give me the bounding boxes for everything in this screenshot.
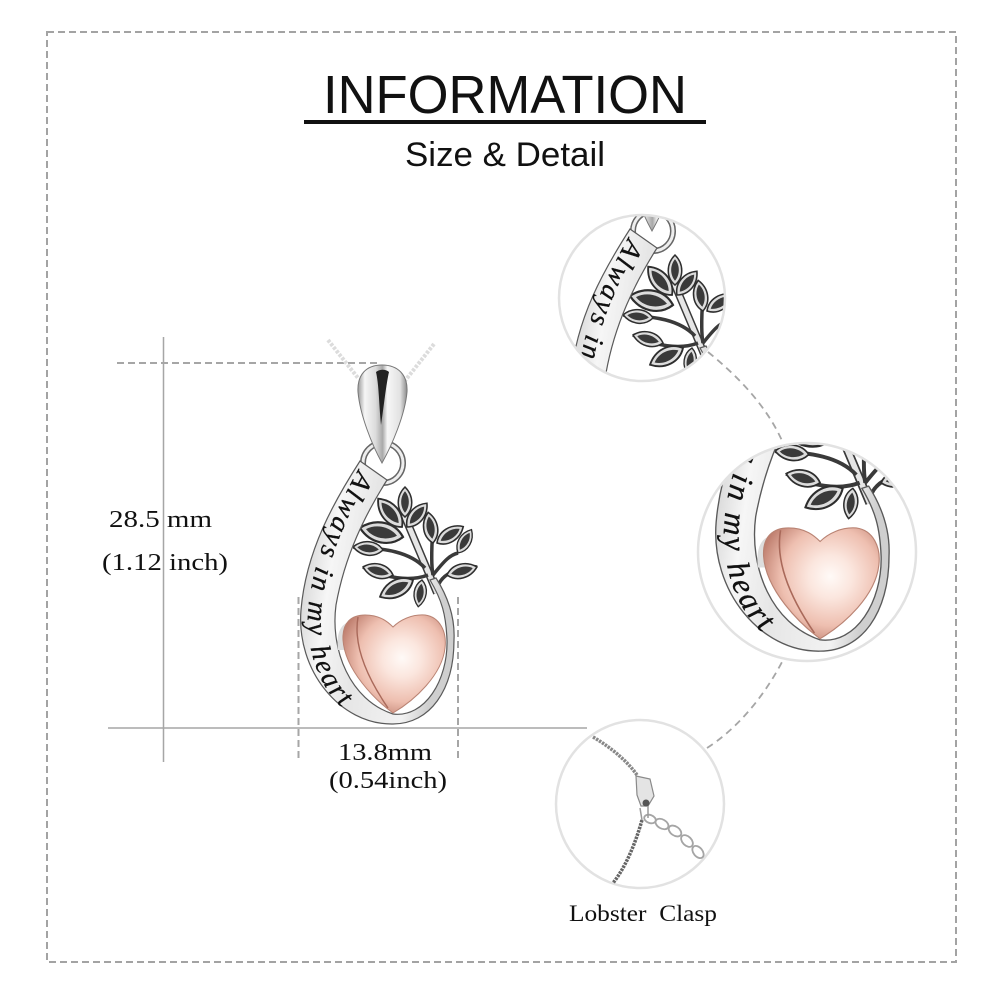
detail circle: tree and engraving: Always in my heart	[582, 236, 640, 358]
connector: heart circle to clasp circle	[707, 662, 782, 748]
detail circle: rose gold heart	[696, 442, 918, 662]
detail circle: lobster clasp	[556, 720, 724, 888]
main pendant with chain: Always in my heart	[302, 468, 370, 707]
width label	[329, 740, 447, 794]
width dimension lines	[298, 597, 458, 762]
clasp label: Lobster Clasp	[569, 901, 717, 926]
connector: tree circle to heart circle	[708, 352, 783, 443]
width label: (0.54inch)	[329, 768, 447, 794]
height label: (1.12 inch)	[102, 550, 228, 576]
width label: 13.8mm	[338, 740, 432, 766]
detail circle: rose gold heart: Always in my heart	[716, 458, 774, 632]
title: INFORMATION	[323, 65, 687, 125]
height label	[102, 507, 228, 576]
height label: 28.5 mm	[109, 507, 212, 533]
detail circle: tree and engraving	[558, 214, 726, 382]
subtitle: Size & Detail	[405, 136, 605, 174]
main pendant with chain	[300, 339, 478, 725]
height dimension lines	[108, 337, 587, 762]
